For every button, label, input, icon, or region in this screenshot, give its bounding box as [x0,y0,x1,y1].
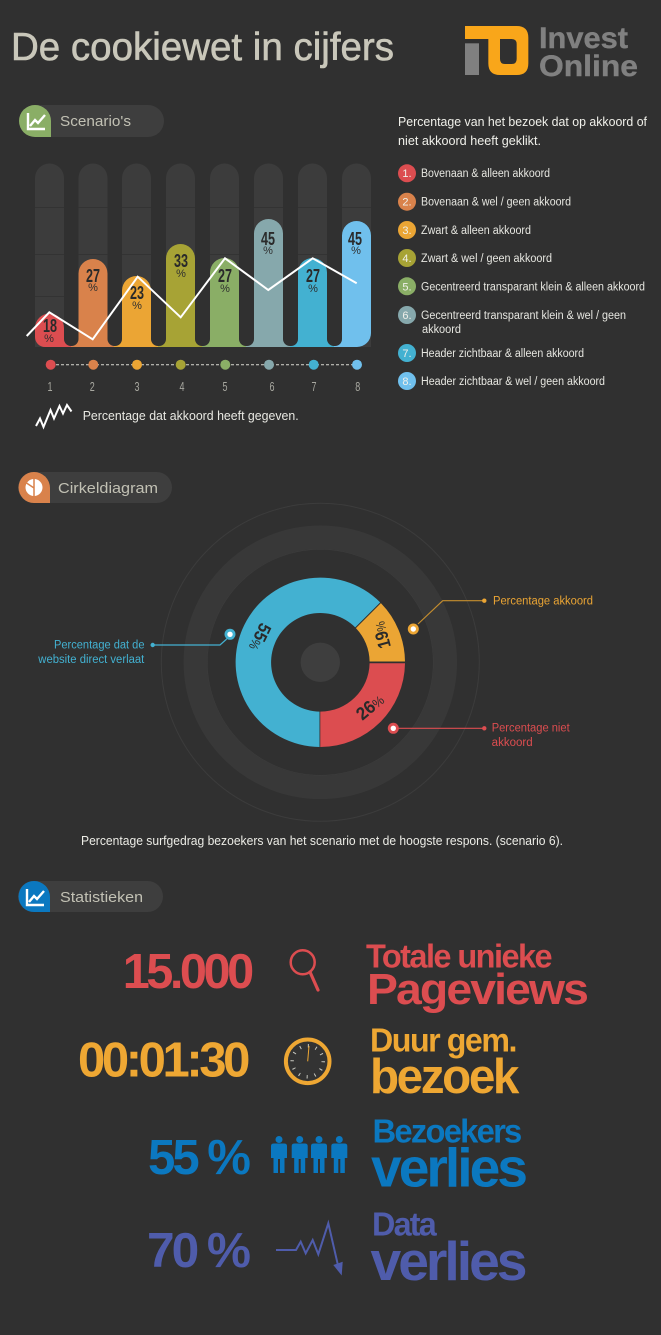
bar values: 45 [261,229,275,249]
bar values: 27 [218,266,232,286]
stat: duur bezoek [78,1022,520,1104]
stat: pageviews: 15.000 [123,945,253,999]
scenario legend: 2. [402,196,412,208]
bar values: 27 [86,266,100,286]
heading pill: Cirkeldiagram [18,472,172,503]
stat: pageviews: Totale unieke [366,938,552,975]
notches [64,318,342,346]
bar values [43,229,362,345]
bar values: % [44,333,54,345]
scenario legend [398,164,645,390]
scenario legend: Header zichtbaar & wel / geen akkoord [421,376,605,388]
axis numbers: 2 [90,379,95,394]
gaps between tracks [64,160,342,350]
segment: 19% orange [356,603,405,662]
scenario legend: Bovenaan & alleen akkoord [421,168,550,180]
bar values: % [263,245,273,257]
scenario legend: Gecentreerd transparant klein & alleen akkoord [421,281,645,293]
stat: duur bezoek: Duur gem. [370,1022,516,1059]
heading pill: Scenario's: Scenario's [60,113,131,130]
line legend [36,405,299,427]
logo: Invest Online [465,22,638,83]
bar values: % [351,245,361,257]
callout: website direct verlaat [37,629,236,666]
scenario legend: 4. [402,253,412,265]
scenario legend: Bovenaan & wel / geen akkoord [421,196,571,208]
stat: data verlies: verlies [370,1230,526,1292]
bar values: % [308,283,318,295]
bar chart: scenarios [27,160,371,394]
axis numbers: 5 [222,379,228,394]
chart tracks [35,164,371,347]
coloured bars [35,219,371,347]
donut caption: Percentage surfgedrag bezoekers van het scenario met de hoogste respons. (scenario 6). [81,833,563,848]
scenario legend: 1. [402,168,412,180]
callout: website direct verlaat: website direct verlaat [37,654,145,666]
stat: pageviews: Pageviews [367,965,587,1014]
background rings [161,503,479,821]
callout: percentage niet akkoord [388,722,570,749]
stat: duur bezoek: bezoek [370,1050,520,1104]
icon: clock [286,1040,330,1083]
axis numbers: 8 [355,379,360,394]
stat: pageviews [123,938,587,1014]
callout: percentage akkoord [408,596,593,634]
callout: percentage niet akkoord: Percentage niet [492,722,570,734]
scenario legend: Header zichtbaar & alleen akkoord [421,348,584,360]
bar values: 23 [130,283,144,303]
segment: 26% red [320,663,405,747]
donut chart [161,503,479,821]
stat: data verlies: 70 % [147,1224,250,1278]
bar values: 27 [306,266,320,286]
scenario legend: 8. [402,376,412,388]
stat: bezoekers verlies: verlies [371,1137,526,1199]
scenario legend: akkoord [422,324,461,336]
bar values: % [132,300,142,312]
scenario legend: 7. [402,348,412,360]
donut values: 26% [352,689,388,724]
axis numbers: 7 [312,379,316,394]
bar values: % [88,282,98,294]
axis numbers: 6 [270,379,274,394]
logo: Invest Online: Invest [539,22,628,55]
heading pill: Statistieken [18,881,163,912]
intro text: legend description: Percentage van het bezoek dat op akkoord of [398,114,647,129]
bar values: 33 [174,251,188,271]
donut values: 19% [368,619,395,651]
intro text: legend description: niet akkoord heeft geklikt. [398,133,541,148]
stat: bezoekers verlies: 55 % [148,1131,250,1185]
callout: website direct verlaat: Percentage dat de [54,640,144,652]
scenario legend: 3. [402,225,412,237]
scenario legend: 6. [402,310,412,322]
logo: Invest Online: Online [539,50,638,83]
intro text: legend description [398,114,647,148]
scenario legend: Zwart & alleen akkoord [421,225,531,237]
scenario legend: 5. [402,281,412,293]
icon: magnifier [291,950,318,990]
donut values [245,619,395,724]
axis numbers: 1 [48,379,52,394]
title: De cookiewet in cijfers [11,26,394,69]
scenario legend: Gecentreerd transparant klein & wel / geen [421,310,626,322]
centre disc [301,643,340,682]
axis dots [46,360,362,370]
bar values: % [220,283,230,295]
line legend: Percentage dat akkoord heeft gegeven. [83,408,299,423]
stat: data verlies: Data [372,1206,437,1243]
axis numbers [48,379,360,394]
axis numbers: 4 [180,379,184,394]
line series [27,258,357,339]
heading pill: Scenario's [19,105,164,137]
bar values: % [176,268,186,280]
segment: 55% blue [236,578,380,747]
callout: percentage niet akkoord: akkoord [492,737,533,749]
icon: falling line with arrow [276,1223,343,1276]
scenario legend: Zwart & wel / geen akkoord [421,253,552,265]
stat: duur bezoek: 00:01:30 [78,1034,249,1088]
icon: people [271,1136,347,1173]
bar values: 18 [43,316,57,336]
stat: data verlies [147,1206,526,1292]
heading pill: Cirkeldiagram: Cirkeldiagram [58,480,158,497]
donut values: 55% [245,620,275,654]
callout: percentage akkoord: Percentage akkoord [493,596,593,608]
stat: bezoekers verlies: Bezoekers [372,1113,521,1150]
axis numbers: 3 [134,379,140,394]
stat: bezoekers verlies [148,1113,526,1199]
heading pill: Statistieken: Statistieken [60,889,143,906]
bar values: 45 [348,229,362,249]
